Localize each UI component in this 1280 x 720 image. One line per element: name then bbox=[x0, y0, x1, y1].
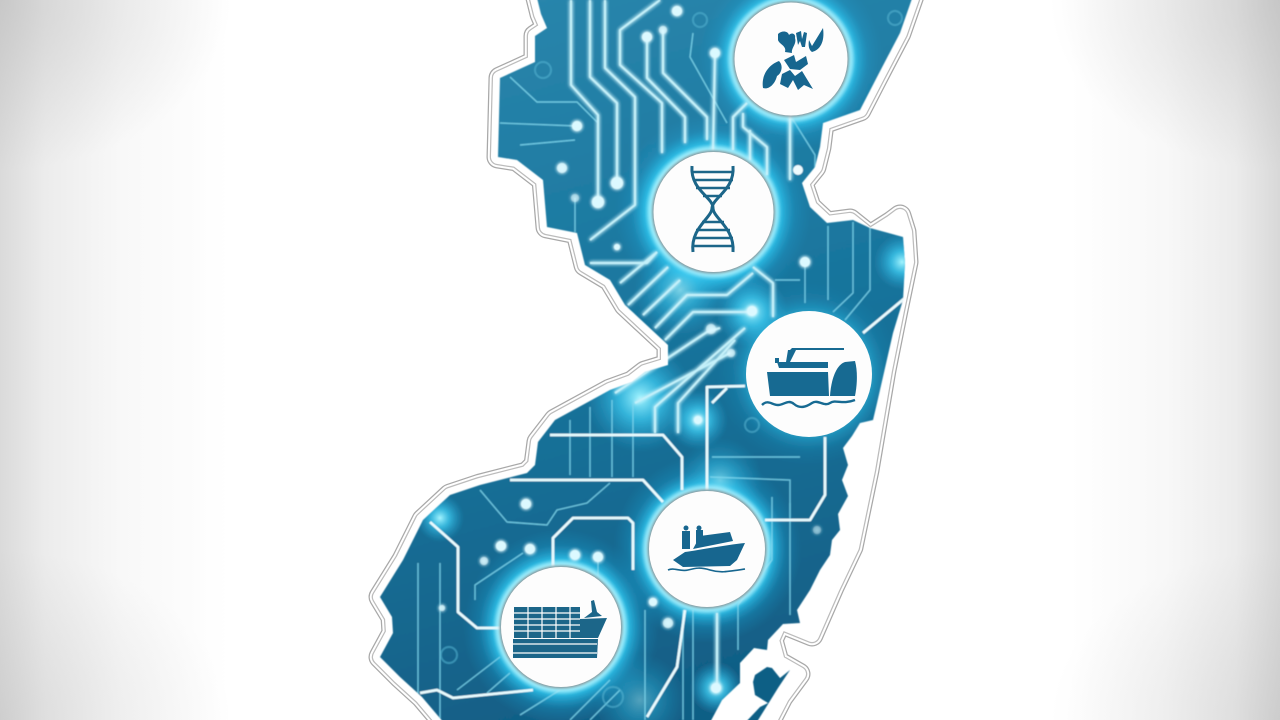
node: tugboat bbox=[746, 311, 872, 437]
faint circuit traces bbox=[418, 33, 870, 720]
state outline: double contour bbox=[380, 0, 915, 720]
node dots bbox=[439, 6, 821, 693]
state map fill with circuit board bbox=[380, 0, 930, 720]
bright thick traces bbox=[420, 298, 905, 717]
node: passenger ship bbox=[646, 488, 768, 610]
coastal node dot bbox=[793, 165, 803, 175]
faint circuit motifs bbox=[441, 11, 902, 707]
node: container ship bbox=[498, 564, 624, 690]
glows around nodes and hot spots bbox=[416, 0, 930, 720]
node: top, abstract biotech figure bbox=[731, 0, 851, 119]
node: DNA helix bbox=[650, 149, 776, 275]
main circuit traces bbox=[571, 0, 790, 687]
